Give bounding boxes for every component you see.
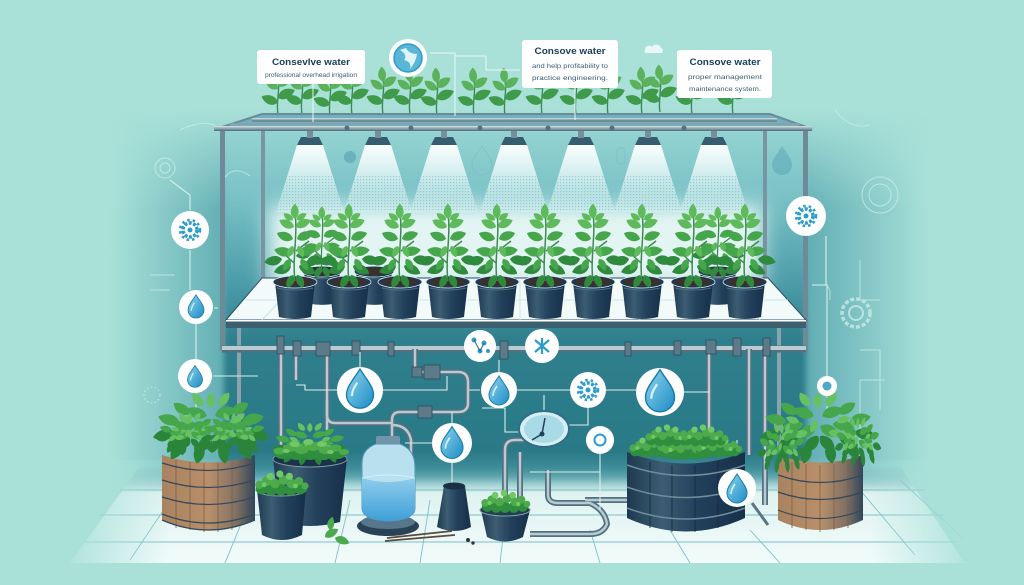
callout 3: proper management: [688, 75, 762, 81]
small pot with seedlings: [480, 490, 530, 542]
globe icon: [389, 39, 520, 116]
callout 1: professional overhead irrigation: [265, 73, 357, 79]
black cone container: [437, 482, 471, 531]
icon: gear left: [171, 211, 209, 249]
callout 3: maintenance system.: [689, 87, 761, 93]
icon: large drop left: [337, 367, 383, 413]
icon: large drop right: [636, 368, 684, 416]
frame posts: [220, 118, 808, 448]
icon: small ring right: [817, 376, 837, 396]
icon: drop left upper: [179, 290, 213, 324]
grow lights: [276, 131, 748, 212]
callout 2: and help profitability to: [532, 64, 609, 70]
callout 1: [257, 50, 365, 122]
icon: drop on tank: [718, 469, 756, 507]
icon: network on pipe: [464, 330, 496, 362]
back row plants: [295, 206, 745, 305]
callout 3: Consove water: [690, 57, 761, 68]
icon: tool on pipe: [525, 329, 559, 363]
icon: gear centre: [570, 372, 606, 408]
large black pot: [272, 421, 349, 526]
table top: [226, 278, 806, 328]
icon: ring node: [586, 426, 614, 454]
callout 3: [677, 50, 772, 98]
storage tank with plants: [627, 424, 745, 532]
front row potted plants: [263, 204, 777, 319]
icon: gear right: [786, 196, 826, 236]
faint water symbols: [344, 146, 792, 175]
tools and fallen leaves: [323, 516, 475, 547]
roof frame: [214, 114, 812, 131]
icon: drop above jug: [432, 423, 472, 463]
icon: drop centre: [481, 372, 517, 408]
small black pot: [255, 470, 309, 540]
callout 2: [522, 40, 618, 120]
callout 2: practice engineering.: [532, 76, 608, 82]
gauge: [519, 411, 569, 447]
floor tiles: [60, 460, 980, 566]
callout 2: Consove water: [534, 46, 606, 57]
decorative side icons, faint: [144, 110, 898, 440]
teal back wall: [123, 121, 916, 486]
cloud icon: [645, 45, 663, 53]
callout 1: Consevlve water: [272, 57, 350, 68]
left barrel planter: [152, 390, 271, 532]
plumbing: [222, 336, 806, 534]
roof sprouts: [260, 64, 752, 116]
connector lines: [170, 180, 827, 510]
icon: drop left lower: [178, 359, 212, 393]
water jug: [357, 436, 419, 536]
right barrel planter: [757, 390, 882, 532]
